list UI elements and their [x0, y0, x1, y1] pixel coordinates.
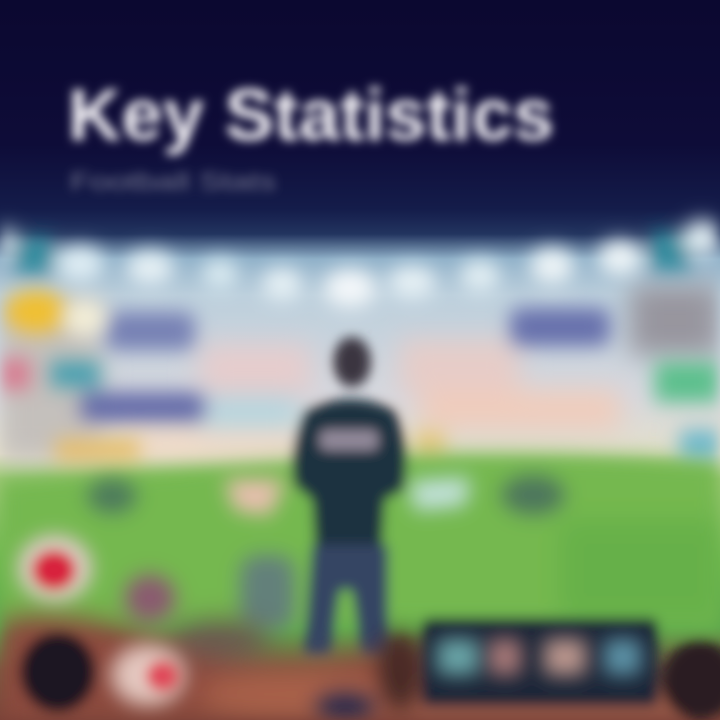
- icon: distant player right: [501, 475, 565, 515]
- title: Key Statistics: [68, 75, 554, 156]
- panel: football pitch: [0, 453, 720, 625]
- panel: foreground crowd: [0, 536, 720, 720]
- icon: standing person silhouette: [292, 337, 407, 655]
- icon: dark head right: [662, 640, 720, 720]
- panel: blurred stadium photo: [0, 220, 720, 720]
- icon: distant player left: [87, 478, 137, 514]
- subtitle: Football Stats: [70, 168, 276, 196]
- panel: stadium stands: [0, 285, 720, 462]
- icon: red cap: [32, 550, 76, 590]
- icon: dark head foreground: [20, 632, 96, 712]
- icon: small figure beside person: [240, 555, 295, 630]
- chart: phone screen with scoreboard: [422, 618, 658, 706]
- panel: floodlight band: [0, 220, 720, 336]
- icon: yellow stadium banner: [4, 290, 68, 334]
- icon: red accent: [146, 661, 178, 691]
